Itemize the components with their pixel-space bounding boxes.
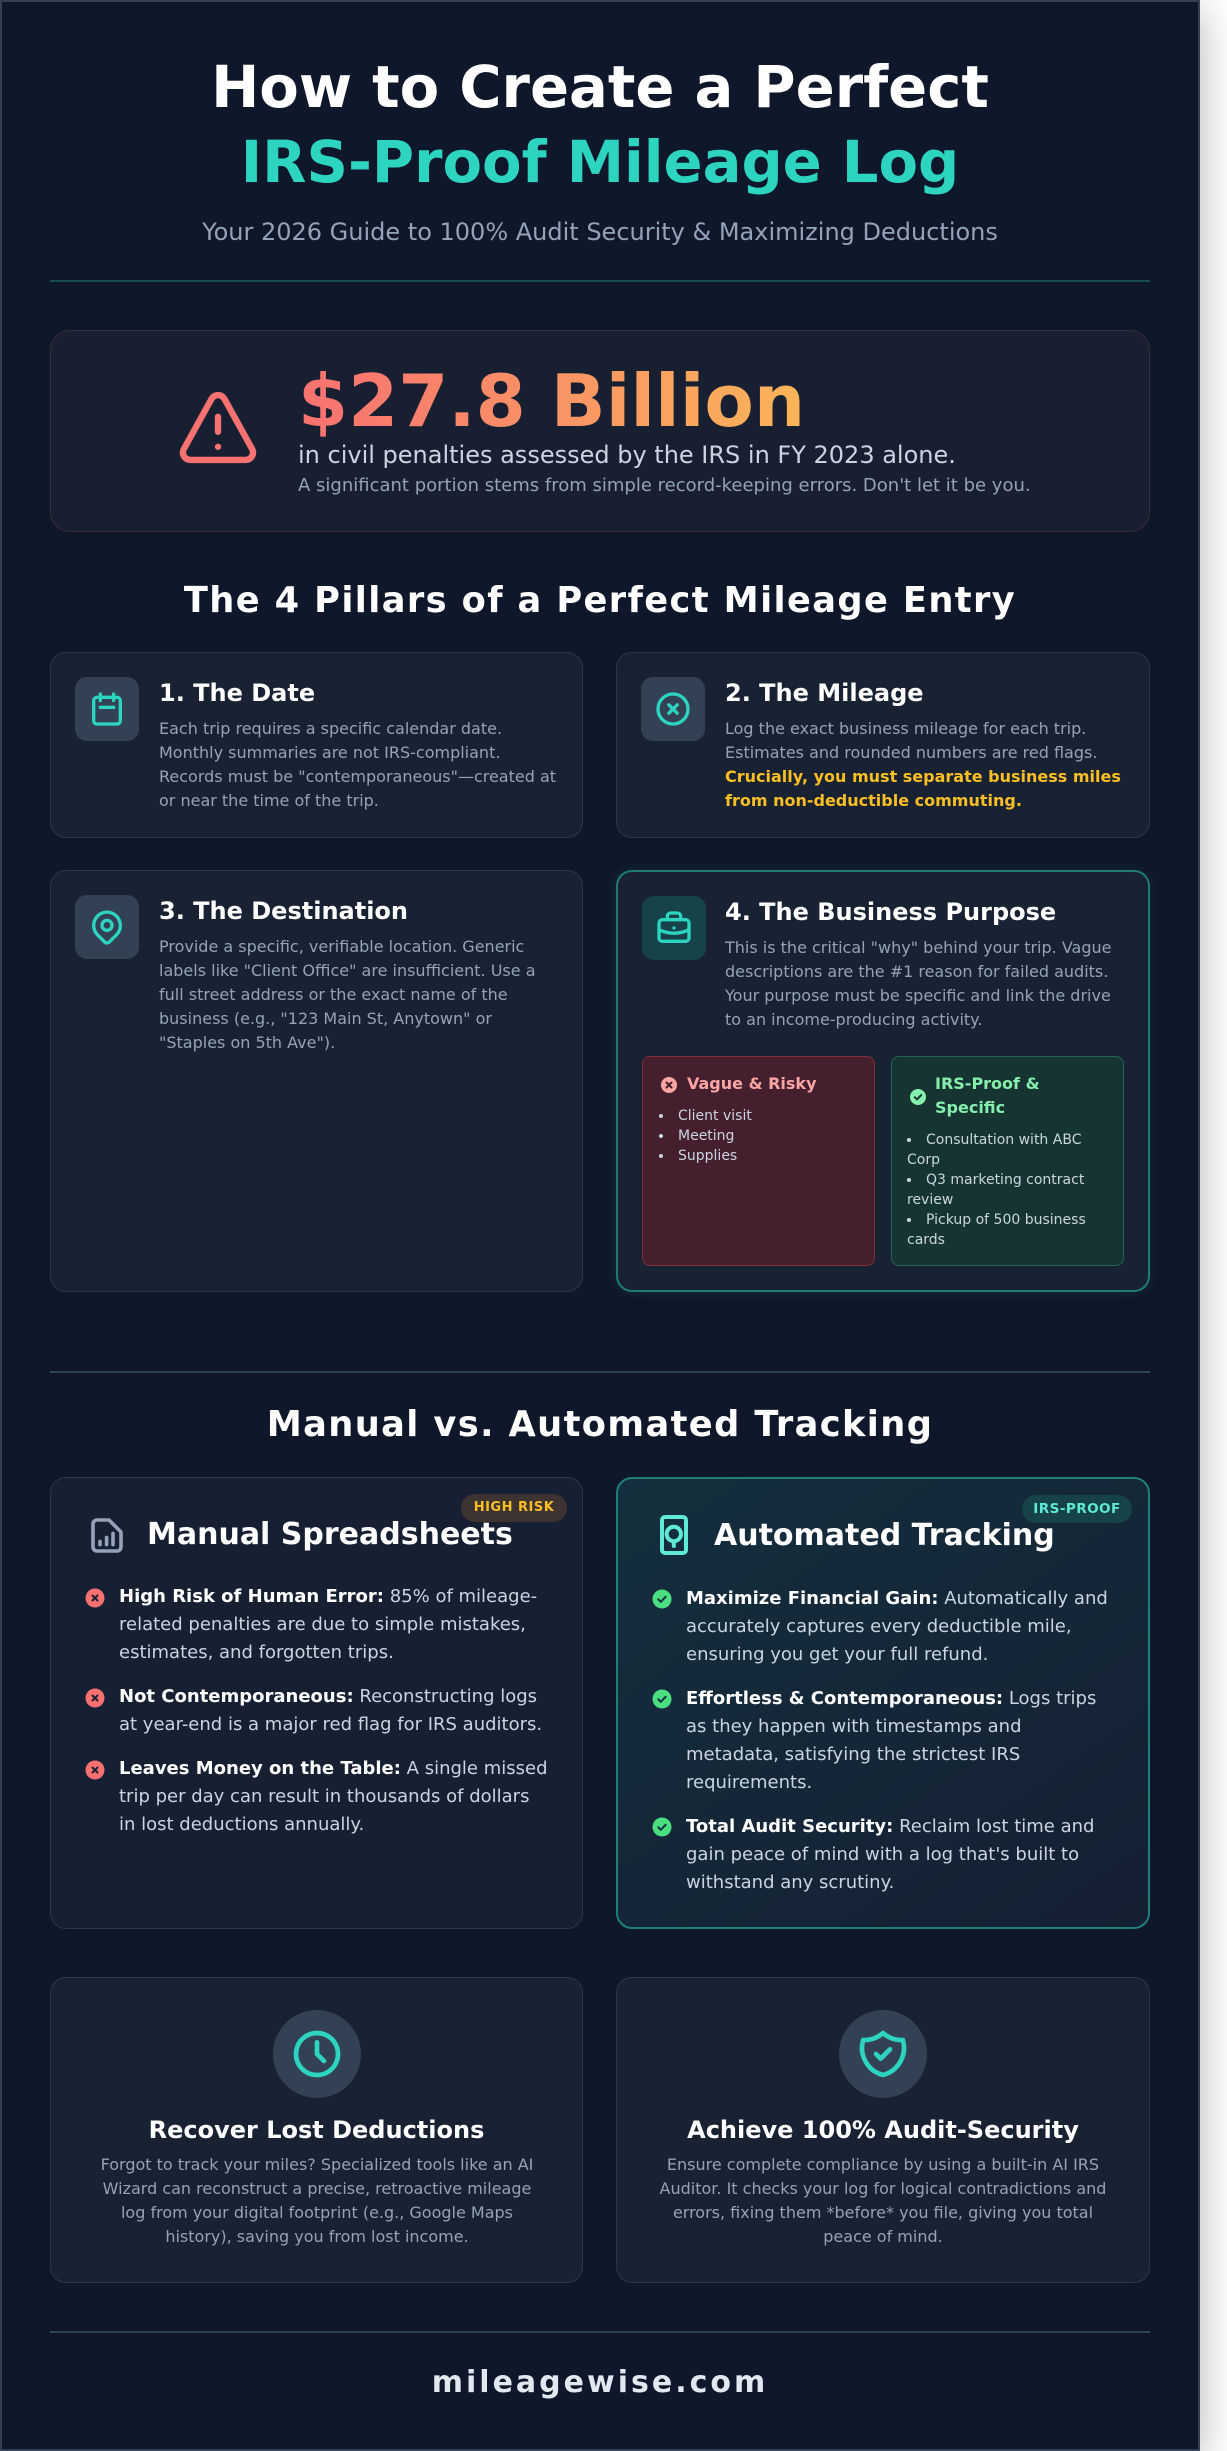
list text: metadata, satisfying the strictest IRS: [686, 1744, 1020, 1765]
footer website: mileagewise.com: [432, 2365, 768, 2400]
list text: accurately captures every deductible mile,: [686, 1616, 1072, 1637]
example list: Meeting: [678, 1128, 734, 1144]
feature text: history), saving you from lost income.: [165, 2227, 469, 2246]
list text: requirements.: [686, 1772, 812, 1793]
example list: Pickup of 500 business cards: [907, 1212, 1086, 1248]
pillar text: [159, 937, 536, 1052]
pillar text: Crucially, you must separate business miles: [725, 767, 1121, 786]
example list: Q3 marketing contract review: [907, 1172, 1084, 1208]
example box: vague and risky: [642, 1056, 875, 1266]
panel: the destination: [50, 870, 583, 1292]
pillar text: Each trip requires a specific calendar date.: [159, 719, 502, 738]
list item: [86, 1688, 104, 1708]
card heading: Manual Spreadsheets: [147, 1517, 513, 1552]
pillar text: from non-deductible commuting.: [725, 791, 1022, 810]
list item: [652, 1818, 672, 1836]
list text: [686, 1816, 1094, 1893]
feature text: Forgot to track your miles? Specialized tools like an AI: [101, 2155, 533, 2174]
list text: Total Audit Security: Reclaim lost time and: [686, 1816, 1094, 1837]
list text: High Risk of Human Error: 85% of mileage-: [119, 1586, 537, 1607]
list item: [652, 1690, 672, 1708]
list text: Not Contemporaneous: Reconstructing logs: [119, 1686, 537, 1707]
icon: green check: [910, 1089, 926, 1105]
list text: Effortless & Contemporaneous: Logs trips: [686, 1688, 1096, 1709]
title: How to Create a Perfect: [211, 54, 989, 121]
feature text: Ensure complete compliance by using a built-in AI IRS: [667, 2155, 1099, 2174]
list text: trip per day can result in thousands of dollars: [119, 1786, 529, 1807]
pillar title: 3. The Destination: [159, 897, 408, 925]
example list: [659, 1108, 752, 1164]
badge: high risk: HIGH RISK: [474, 1500, 554, 1515]
list text: estimates, and forgotten trips.: [119, 1642, 394, 1663]
stat number: [298, 356, 1031, 446]
pillar text: to an income-producing activity.: [725, 1010, 982, 1029]
list text: Leaves Money on the Table: A single missed: [119, 1758, 548, 1779]
pillar text: Log the exact business mileage for each trip.: [725, 719, 1086, 738]
example heading: Vague & Risky: [687, 1074, 816, 1093]
icon: warning triangle: [180, 392, 256, 464]
list text: gain peace of mind with a log that's built to: [686, 1844, 1079, 1865]
feature text: [101, 2155, 533, 2246]
panel: achieve audit security: [616, 1977, 1150, 2283]
panel: manual spreadsheets: [50, 1477, 583, 1929]
panel: penalty stat: [50, 330, 1150, 532]
feature title: Achieve 100% Audit-Security: [687, 2116, 1079, 2144]
icon: red x: [661, 1077, 677, 1093]
badge: irs-proof: [1022, 1495, 1132, 1523]
icon: clock: [273, 2010, 361, 2098]
pillar text: descriptions are the #1 reason for failed audits.: [725, 962, 1108, 981]
list text: [119, 1758, 548, 1835]
pillar text: "Staples on 5th Ave").: [159, 1033, 335, 1052]
pillar title: 1. The Date: [159, 679, 315, 707]
icon: phone with location: [660, 1515, 688, 1555]
icon: briefcase: [642, 896, 706, 960]
stat number: $27.8 Billion: [298, 359, 805, 443]
pillar text: Monthly summaries are not IRS-compliant.: [159, 743, 500, 762]
panel: recover lost deductions: [50, 1977, 583, 2283]
title: IRS-Proof Mileage Log: [241, 129, 959, 196]
list text: in lost deductions annually.: [119, 1814, 364, 1835]
list text: Maximize Financial Gain: Automatically and: [686, 1588, 1108, 1609]
badge: irs-proof: IRS-PROOF: [1033, 1501, 1121, 1517]
list text: related penalties are due to simple mistakes,: [119, 1614, 526, 1635]
pillar text: or near the time of the trip.: [159, 791, 379, 810]
example heading: IRS-Proof &: [935, 1074, 1040, 1093]
panel: the date: [50, 652, 583, 838]
feature text: peace of mind.: [823, 2227, 943, 2246]
heading: manual vs automated: Manual vs. Automated Tracking: [267, 1404, 933, 1445]
pillar text: Provide a specific, verifiable location. Generic: [159, 937, 524, 956]
title: [211, 54, 989, 196]
pillar text: [159, 719, 556, 810]
list text: [686, 1588, 1108, 1665]
icon: shield check: [839, 2010, 927, 2098]
list text: ensuring you get your full refund.: [686, 1644, 988, 1665]
list item: [86, 1760, 104, 1780]
feature title: Recover Lost Deductions: [149, 2116, 484, 2144]
pillar title: 4. The Business Purpose: [725, 898, 1056, 926]
example heading: [935, 1074, 1040, 1117]
list text: [119, 1686, 542, 1735]
panel: the mileage: [616, 652, 1150, 838]
feature text: errors, fixing them *before* you file, giving you total: [673, 2203, 1093, 2222]
icon: circled x: [641, 677, 705, 741]
example heading: Specific: [935, 1098, 1005, 1117]
feature text: Auditor. It checks your log for logical contradictions and: [660, 2179, 1106, 2198]
example list: Supplies: [678, 1148, 737, 1164]
pillar text: Records must be "contemporaneous"—created at: [159, 767, 556, 786]
pillar text: [724, 938, 1111, 1029]
pillar text: Estimates and rounded numbers are red flags.: [725, 743, 1097, 762]
subtitle: Your 2026 Guide to 100% Audit Security & Maximizing Deductions: [202, 218, 998, 246]
pillar text: business (e.g., "123 Main St, Anytown" or: [159, 1009, 492, 1028]
list text: withstand any scrutiny.: [686, 1872, 894, 1893]
panel: automated tracking: [616, 1477, 1150, 1929]
pillar text: labels like "Client Office" are insufficient. Use a: [159, 961, 536, 980]
card heading: Automated Tracking: [714, 1518, 1055, 1553]
badge: high risk: [461, 1494, 567, 1522]
icon: map pin: [75, 895, 139, 959]
list text: as they happen with timestamps and: [686, 1716, 1022, 1737]
list text: at year-end is a major red flag for IRS auditors.: [119, 1714, 542, 1735]
icon: spreadsheet file: [91, 1518, 123, 1553]
pillar text: This is the critical "why" behind your trip. Vague: [725, 938, 1111, 957]
example list: [907, 1132, 1086, 1248]
list text: [686, 1688, 1096, 1793]
stat note: A significant portion stems from simple record-keeping errors. Don't let it be you.: [298, 475, 1031, 496]
example list: Client visit: [678, 1108, 752, 1124]
list text: [119, 1586, 537, 1663]
example box: irs-proof and specific: [891, 1056, 1124, 1266]
pillar text: Your purpose must be specific and link the drive: [725, 986, 1111, 1005]
list item: [652, 1590, 672, 1608]
stat description: in civil penalties assessed by the IRS in FY 2023 alone.: [298, 441, 956, 469]
pillar text: full street address or the exact name of the: [159, 985, 508, 1004]
pillar title: 2. The Mileage: [725, 679, 924, 707]
heading: four pillars: The 4 Pillars of a Perfect Mileage Entry: [184, 580, 1016, 621]
feature text: [660, 2155, 1106, 2246]
list item: [86, 1588, 104, 1608]
feature text: log from your digital footprint (e.g., Google Maps: [121, 2203, 513, 2222]
feature text: Wizard can reconstruct a precise, retroactive mileage: [103, 2179, 531, 2198]
icon: calendar: [75, 677, 139, 741]
pillar text: [725, 719, 1121, 810]
example list: Consultation with ABC Corp: [907, 1132, 1081, 1168]
panel: the business purpose: [616, 870, 1150, 1292]
